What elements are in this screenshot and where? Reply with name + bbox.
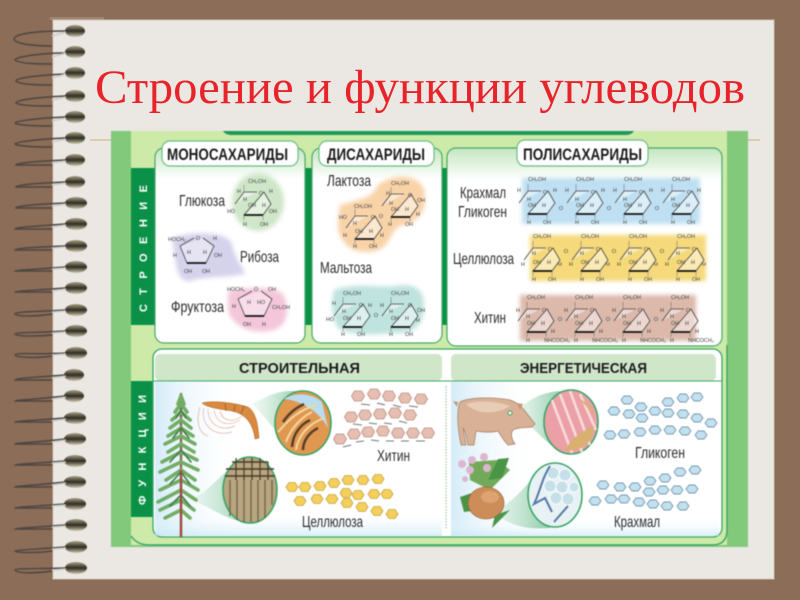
chain: chitin: NHCOCH₃ (688, 338, 714, 344)
lactose: Лактоза (327, 173, 371, 190)
chain: chitin: H (695, 329, 699, 335)
glucose: HO (227, 209, 235, 215)
circle: pig muscle tissue (544, 390, 598, 454)
chain: cellulose: H (628, 277, 632, 283)
maltose: OH (417, 308, 425, 314)
chain: chitin: H (516, 308, 520, 314)
chain: chitin: OH (527, 321, 535, 327)
maltose: H (380, 303, 384, 309)
connector: tree to circle (190, 458, 250, 522)
connector: potato to circle (487, 465, 550, 528)
chain: starch and glycogen: OH (639, 220, 647, 226)
chain: chitin: Хитин (474, 310, 506, 327)
chain: cellulose: H (665, 262, 669, 268)
maltose: OH (343, 316, 351, 322)
diagram: chitin fibers (334, 389, 434, 465)
lactose: H (416, 212, 420, 218)
chain: cellulose: H (617, 262, 621, 268)
glucose: H (269, 189, 273, 195)
chain: starch and glycogen: H (527, 197, 531, 203)
chain: chitin: NHCOCH₃ (640, 338, 666, 344)
lactose: H (405, 207, 409, 213)
chain: starch and glycogen: H (661, 188, 665, 194)
chain: cellulose: O (660, 249, 664, 255)
chain: starch and glycogen: H (638, 203, 642, 209)
chain: chitin: H (526, 314, 530, 320)
chain: cellulose: Целлюлоза (453, 251, 514, 268)
chain: chitin: O (590, 308, 594, 314)
heading: structural: СТРОИТЕЛЬНАЯ (239, 360, 360, 377)
chain: cellulose: H (643, 260, 647, 266)
maltose: Мальтоза (320, 260, 372, 277)
chain: chitin: H (574, 314, 578, 320)
lactose: O (371, 215, 375, 221)
glucose: H (243, 197, 247, 203)
chain: starch and glycogen: H (671, 197, 675, 203)
chain: starch and glycogen: H (623, 220, 627, 226)
panel: disaccharides (312, 141, 442, 343)
chain: cellulose: CH₂OH (533, 234, 551, 240)
ribose: H (203, 250, 207, 256)
lactose: H (369, 229, 373, 235)
ribose: Рибоза (240, 249, 279, 266)
chain: starch and glycogen: O (687, 190, 691, 196)
icon: pig (453, 398, 535, 445)
fructose: OH (243, 322, 251, 328)
chain: starch and glycogen: CH₂OH (528, 177, 546, 183)
chain: starch and glycogen: H (575, 197, 579, 203)
icon: fir tree (158, 393, 198, 537)
chain: cellulose: H (606, 262, 610, 268)
chain: cellulose: CH₂OH (629, 234, 647, 240)
maltose: H (416, 318, 420, 324)
chain: cellulose: OH (533, 260, 541, 266)
chain: chitin: H (660, 308, 664, 314)
chain: chitin: CH₂OH (575, 295, 593, 301)
chain: starch and glycogen: H (697, 188, 701, 194)
chain: cellulose: OH (644, 277, 652, 283)
fructose: Фруктоза (171, 299, 224, 316)
chain: starch and glycogen: H (575, 220, 579, 226)
chain: cellulose: O (596, 247, 600, 253)
diagram: glycogen branches (604, 393, 717, 462)
chain: starch and glycogen: H (553, 188, 557, 194)
maltose: H (341, 332, 345, 338)
ribose: OH (214, 253, 222, 259)
fructose: OH (268, 287, 276, 293)
chain: cellulose: H (691, 260, 695, 266)
ribose: HOCH₂ (168, 237, 186, 243)
chain: starch and glycogen: H (527, 220, 531, 226)
label: chitin: Хитин (377, 448, 410, 465)
chain: chitin: H (541, 321, 545, 327)
maltose: H (389, 309, 393, 315)
chain: chitin: CH₂OH (623, 295, 641, 301)
chain: starch and glycogen: O (607, 206, 611, 212)
chain: starch and glycogen: O (559, 206, 563, 212)
heading: disaccharides: ДИСАХАРИДЫ (327, 145, 425, 164)
chain: chitin: H (685, 321, 689, 327)
chain: cellulose: OH (548, 277, 556, 283)
chain: chitin: O (686, 308, 690, 314)
connector: pig to circle (512, 391, 562, 450)
label: structure: СТРОЕНИЕ (138, 185, 150, 312)
chain: chitin (474, 295, 714, 344)
heading: polysaccharides: ПОЛИСАХАРИДЫ (523, 145, 642, 164)
ribose: H (187, 250, 191, 256)
chain: starch and glycogen: O (655, 206, 659, 212)
maltose: O (408, 303, 412, 309)
glucose: OH (269, 209, 277, 215)
chain: cellulose: H (702, 262, 706, 268)
chain: chitin: OH (575, 321, 583, 327)
chain: cellulose: O (692, 247, 696, 253)
chain: cellulose: H (676, 277, 680, 283)
chain: chitin: H (564, 308, 568, 314)
glucose: OH (260, 222, 268, 228)
chain: starch and glycogen: OH (591, 220, 599, 226)
title: Строение и функции углеводов (95, 61, 745, 114)
icon: potato plant (458, 453, 510, 528)
lactose: OH (417, 198, 425, 204)
maltose: O (359, 303, 363, 309)
chain: starch and glycogen (458, 177, 701, 226)
ribose: OH (202, 269, 210, 275)
glucose: Глюкоза (179, 193, 225, 210)
chain: chitin: H (670, 314, 674, 320)
chain: starch and glycogen: CH₂OH (672, 177, 690, 183)
chain: starch and glycogen: O (543, 190, 547, 196)
maltose: H (342, 309, 346, 315)
maltose: O (374, 313, 378, 319)
maltose: H (389, 332, 393, 338)
fructose: O (254, 287, 258, 293)
maltose: H (332, 301, 336, 307)
fructose: CH₂OH (272, 305, 290, 311)
lactose: O (379, 214, 383, 220)
lactose: H (389, 201, 393, 207)
maltose: H (357, 316, 361, 322)
glucose: H (243, 222, 247, 228)
circle: starch grains (528, 463, 582, 527)
lactose: OH (405, 222, 413, 228)
ribose: H (213, 236, 217, 242)
ribose: OH (184, 269, 192, 275)
chain: cellulose: OH (692, 277, 700, 283)
chain: starch and glycogen: H (517, 188, 521, 194)
heading: energetic: ЭНЕРГЕТИЧЕСКАЯ (520, 360, 647, 377)
chain: cellulose: H (547, 260, 551, 266)
glucose: O (259, 191, 263, 197)
chain: chitin: O (558, 317, 562, 323)
chain: chitin: H (526, 338, 530, 344)
chain: starch and glycogen: Крахмал (460, 185, 506, 202)
chain: cellulose: H (532, 277, 536, 283)
chain: chitin: O (638, 308, 642, 314)
maltose: HO (326, 317, 334, 323)
chain: chitin: H (574, 338, 578, 344)
chain: cellulose: O (564, 249, 568, 255)
maltose: CH₂OH (391, 291, 409, 297)
chain: starch and glycogen: OH (624, 203, 632, 209)
chain: starch and glycogen: H (649, 188, 653, 194)
chain: chitin: H (551, 329, 555, 335)
heading: monosaccharides: МОНОСАХАРИДЫ (167, 145, 288, 164)
diagram: cellulose fibers (286, 474, 398, 531)
maltose (320, 260, 425, 338)
connector: shrimp to circle (252, 391, 300, 455)
lactose: OH (391, 207, 399, 213)
chain: chitin: CH₂OH (527, 295, 545, 301)
lactose: H (386, 191, 390, 197)
chain: cellulose: OH (629, 260, 637, 266)
lactose: HO (339, 215, 347, 221)
chain: starch and glycogen: OH (687, 220, 695, 226)
chain: starch and glycogen: H (565, 188, 569, 194)
label: starch: Крахмал (614, 514, 660, 531)
chain: cellulose: CH₂OH (677, 234, 695, 240)
lactose: H (353, 244, 357, 250)
chain: chitin: H (647, 329, 651, 335)
glucose: H (237, 189, 241, 195)
ribose: O (196, 236, 200, 242)
chain: cellulose: OH (596, 277, 604, 283)
chain: starch and glycogen: H (590, 203, 594, 209)
chain: chitin: H (599, 329, 603, 335)
chain: starch and glycogen: H (601, 188, 605, 194)
fructose: HO (257, 300, 265, 306)
label: glycogen: Гликоген (635, 445, 685, 462)
lactose: H (343, 233, 347, 239)
panel: monosaccharides (155, 141, 305, 343)
chain: chitin: O (606, 317, 610, 323)
chain: chitin: CH₂OH (671, 295, 689, 301)
chain: chitin: H (622, 338, 626, 344)
chain: starch and glycogen: O (639, 190, 643, 196)
lactose: OH (369, 244, 377, 250)
glucose (179, 173, 284, 231)
chain: cellulose (453, 234, 706, 283)
chain: cellulose: CH₂OH (581, 234, 599, 240)
maltose: CH₂OH (343, 291, 361, 297)
chain: starch and glycogen: OH (672, 203, 680, 209)
chain: chitin: OH (623, 321, 631, 327)
label: functions: ФУНКЦИИ (137, 395, 149, 505)
chain: chitin: O (654, 317, 658, 323)
panel: polysaccharides (447, 140, 722, 346)
chain: chitin: H (612, 308, 616, 314)
chain: starch and glycogen: H (686, 203, 690, 209)
glucose: CH₂OH (248, 179, 266, 185)
chain: starch and glycogen: Гликоген (458, 204, 507, 221)
lactose: OH (355, 229, 363, 235)
ribose (168, 233, 279, 281)
chain: cellulose: O (548, 247, 552, 253)
chain: chitin: NHCOCH₃ (544, 338, 570, 344)
chain: starch and glycogen: OH (543, 220, 551, 226)
lactose: H (353, 221, 357, 227)
fructose (171, 287, 290, 332)
poster: carbohydrates (111, 131, 748, 547)
chain: starch and glycogen: H (542, 203, 546, 209)
chain: starch and glycogen: CH₂OH (624, 177, 642, 183)
lactose: H (380, 233, 384, 239)
glucose: OH (248, 203, 256, 209)
circle: shrimp shell detail (275, 391, 331, 455)
lactose: CH₂OH (354, 204, 372, 210)
chain: cellulose: O (612, 249, 616, 255)
chain: cellulose: H (569, 262, 573, 268)
maltose: H (368, 303, 372, 309)
chain: cellulose: H (676, 251, 680, 257)
chain: chitin: H (670, 338, 674, 344)
chain: chitin: H (622, 314, 626, 320)
chain: starch and glycogen: H (623, 197, 627, 203)
chain: cellulose: H (595, 260, 599, 266)
diagram: starch branches (589, 466, 701, 531)
chain: starch and glycogen: H (613, 188, 617, 194)
chain: cellulose: H (580, 251, 584, 257)
ribose: H (173, 253, 177, 259)
chain: starch and glycogen: CH₂OH (576, 177, 594, 183)
chain: cellulose: H (654, 262, 658, 268)
lactose: CH₂OH (391, 181, 409, 187)
spiral binding (14, 25, 87, 574)
fructose: HOCH₂ (227, 287, 245, 293)
chain: chitin: H (589, 321, 593, 327)
maltose: OH (405, 332, 413, 338)
chain: chitin: O (542, 308, 546, 314)
chain: cellulose: H (558, 262, 562, 268)
icon: shrimp (198, 402, 259, 439)
chain: cellulose: H (580, 277, 584, 283)
lactose (327, 173, 425, 252)
chain: cellulose: H (521, 262, 525, 268)
glucose: H (262, 203, 266, 209)
chain: chitin: H (637, 321, 641, 327)
chain: starch and glycogen: OH (576, 203, 584, 209)
chain: starch and glycogen: O (591, 190, 595, 196)
lactose: O (408, 193, 412, 199)
chain: starch and glycogen: OH (528, 203, 536, 209)
chain: chitin: OH (671, 321, 679, 327)
maltose: OH (357, 332, 365, 338)
chain: cellulose: H (532, 251, 536, 257)
chain: chitin: NHCOCH₃ (592, 338, 618, 344)
chain: cellulose: OH (581, 260, 589, 266)
fructose: H (262, 322, 266, 328)
fructose: H (232, 304, 236, 310)
label: cellulose: Целлюлоза (302, 514, 363, 531)
maltose: OH (391, 316, 399, 322)
panel: functions background (131, 345, 727, 545)
fructose: H (247, 300, 251, 306)
chain: cellulose: OH (677, 260, 685, 266)
chain: starch and glycogen: H (671, 220, 675, 226)
chain: cellulose: H (628, 251, 632, 257)
circle: wood cells (223, 457, 277, 523)
lactose: H (388, 222, 392, 228)
maltose: H (405, 316, 409, 322)
chain: cellulose: O (644, 247, 648, 253)
